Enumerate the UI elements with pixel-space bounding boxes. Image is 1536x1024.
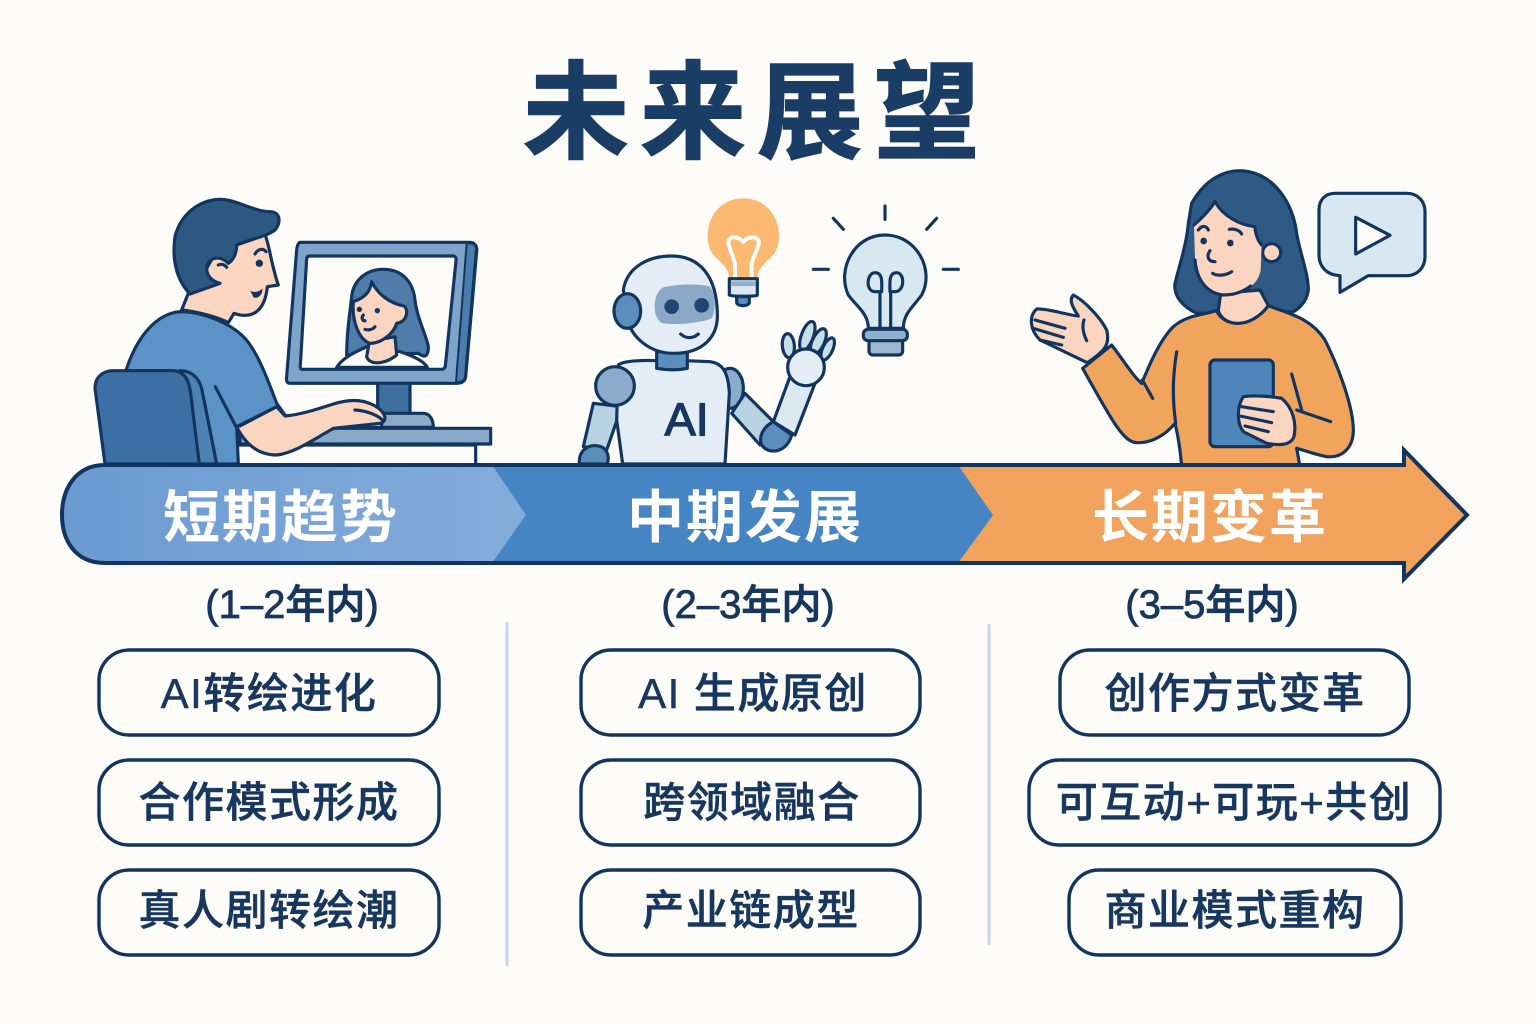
- shirt: [126, 312, 285, 464]
- column: short term items: [99, 650, 439, 955]
- hair: [1175, 171, 1308, 313]
- robot left arm: [579, 403, 622, 464]
- pill: 产业链成型: 产业链成型: [642, 887, 860, 934]
- pill: 产业链成型: [581, 870, 920, 955]
- pill: 合作模式形成: [99, 760, 439, 845]
- robot right arm: [717, 320, 837, 451]
- pill: 商业模式重构: 商业模式重构: [1104, 887, 1366, 934]
- stage heading: long term: 长期变革: [1092, 486, 1328, 550]
- illustration: woman presenting: [1031, 171, 1425, 467]
- robot torso with AI: AI: [665, 394, 709, 446]
- pill: 真人剧转绘潮: 真人剧转绘潮: [138, 887, 400, 934]
- pill: 跨领域融合: [581, 760, 920, 845]
- pill: AI转绘进化: [99, 650, 439, 735]
- period: 1-2 years: (1–2年内): [205, 583, 379, 627]
- illustration: robot with light bulbs: [579, 198, 958, 464]
- neck and face: [1194, 202, 1281, 323]
- robot torso with AI: [596, 360, 729, 464]
- title: 未来展望: [523, 55, 991, 173]
- robot head: [614, 256, 717, 353]
- stage heading: mid term: 中期发展: [627, 486, 863, 550]
- stage heading: short term: 短期趋势: [163, 486, 399, 550]
- pill: 创作方式变革: 创作方式变革: [1104, 670, 1366, 717]
- woman on screen: [337, 269, 428, 367]
- sweater: [1083, 306, 1353, 467]
- period: 2-3 years: (2–3年内): [661, 583, 835, 627]
- chair: [95, 371, 217, 464]
- period: 3-5 years: (3–5年内): [1125, 583, 1299, 627]
- column: mid term items: [581, 650, 920, 955]
- pill: 可互动+可玩+共创: 可互动+可玩+共创: [1056, 779, 1412, 826]
- arm and hand: [237, 400, 385, 455]
- column: long term items: [1029, 650, 1440, 955]
- pill: 创作方式变革: [1060, 650, 1409, 735]
- pill: 跨领域融合: 跨领域融合: [643, 779, 861, 826]
- speech bubble with play icon: [1319, 193, 1425, 292]
- pill: AI 生成原创: AI 生成原创: [638, 670, 868, 717]
- icon: blue bulb with rays: [813, 206, 958, 355]
- tablet: [1210, 360, 1273, 447]
- head and neck: [174, 199, 279, 323]
- robot neck: [657, 352, 687, 370]
- pill: AI 生成原创: [581, 650, 920, 735]
- holding hand: [1238, 396, 1295, 445]
- open hand: [1031, 295, 1108, 363]
- pill: 合作模式形成: 合作模式形成: [138, 779, 400, 826]
- pill: 商业模式重构: [1069, 870, 1401, 955]
- pill: 真人剧转绘潮: [99, 870, 439, 955]
- timeline arrow: [50, 450, 1480, 585]
- pill: 可互动+可玩+共创: [1029, 760, 1440, 845]
- pill: AI转绘进化: AI转绘进化: [161, 670, 377, 717]
- icon: orange bulb: [708, 198, 779, 306]
- desk: [239, 428, 491, 463]
- monitor: [286, 242, 477, 427]
- illustration: man at computer: [95, 199, 491, 464]
